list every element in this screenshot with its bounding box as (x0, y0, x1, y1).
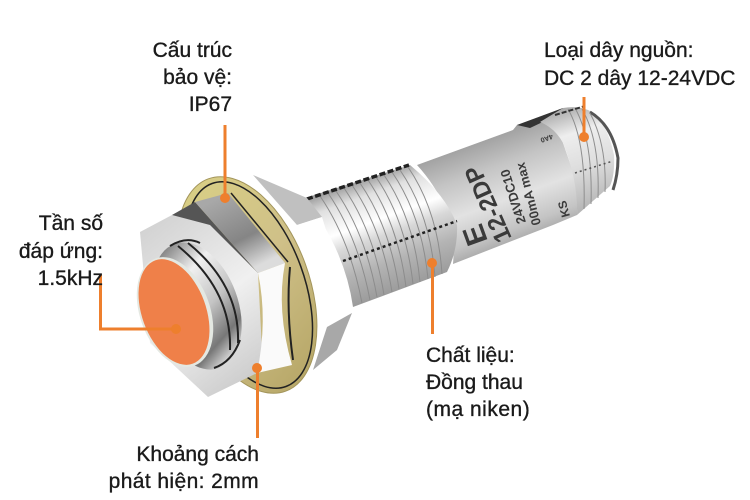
smooth body with printed marking: 4A0 (539, 132, 554, 143)
smooth body with printed marking: KS (555, 199, 573, 219)
label: material: Đồng thau (426, 371, 523, 394)
rear hex nut (253, 175, 352, 370)
label: power wire: Loại dây nguồn: (544, 39, 693, 62)
leader: protection (220, 125, 230, 203)
leader: material (427, 258, 437, 334)
label: frequency: Tần số (39, 212, 103, 235)
label: protection: Cấu trúc (153, 39, 232, 62)
threaded body (305, 165, 457, 307)
sensor photo (123, 106, 618, 412)
label: material: (mạ niken) (426, 398, 530, 421)
leader: power wire (579, 97, 589, 142)
label: protection: bảo vệ: (163, 66, 232, 89)
label: distance: phát hiện: 2mm (109, 470, 259, 493)
orange sensing face (125, 249, 223, 375)
label: frequency: 1.5kHz (38, 267, 103, 290)
threaded front boss (123, 230, 258, 382)
smooth body with printed marking (417, 108, 577, 264)
leader: distance (252, 363, 262, 438)
smooth body with printed marking: E (457, 220, 495, 250)
label: power wire: DC 2 dây 12-24VDC (544, 67, 735, 90)
smooth body with printed marking: 24VDC10 (497, 167, 529, 226)
front hex nut (140, 193, 293, 397)
leader: frequency (100, 275, 181, 334)
label: material: Chất liệu: (426, 344, 515, 367)
label: protection: IP67 (189, 93, 232, 116)
label: distance: Khoảng cách (136, 443, 259, 466)
smooth body with printed marking: 00mA max (513, 160, 544, 227)
connector thread and end cap (517, 106, 618, 215)
label: frequency: đáp ứng: (19, 240, 103, 263)
brass washer (150, 158, 344, 412)
smooth body with printed marking: 12-2DP (460, 161, 517, 247)
